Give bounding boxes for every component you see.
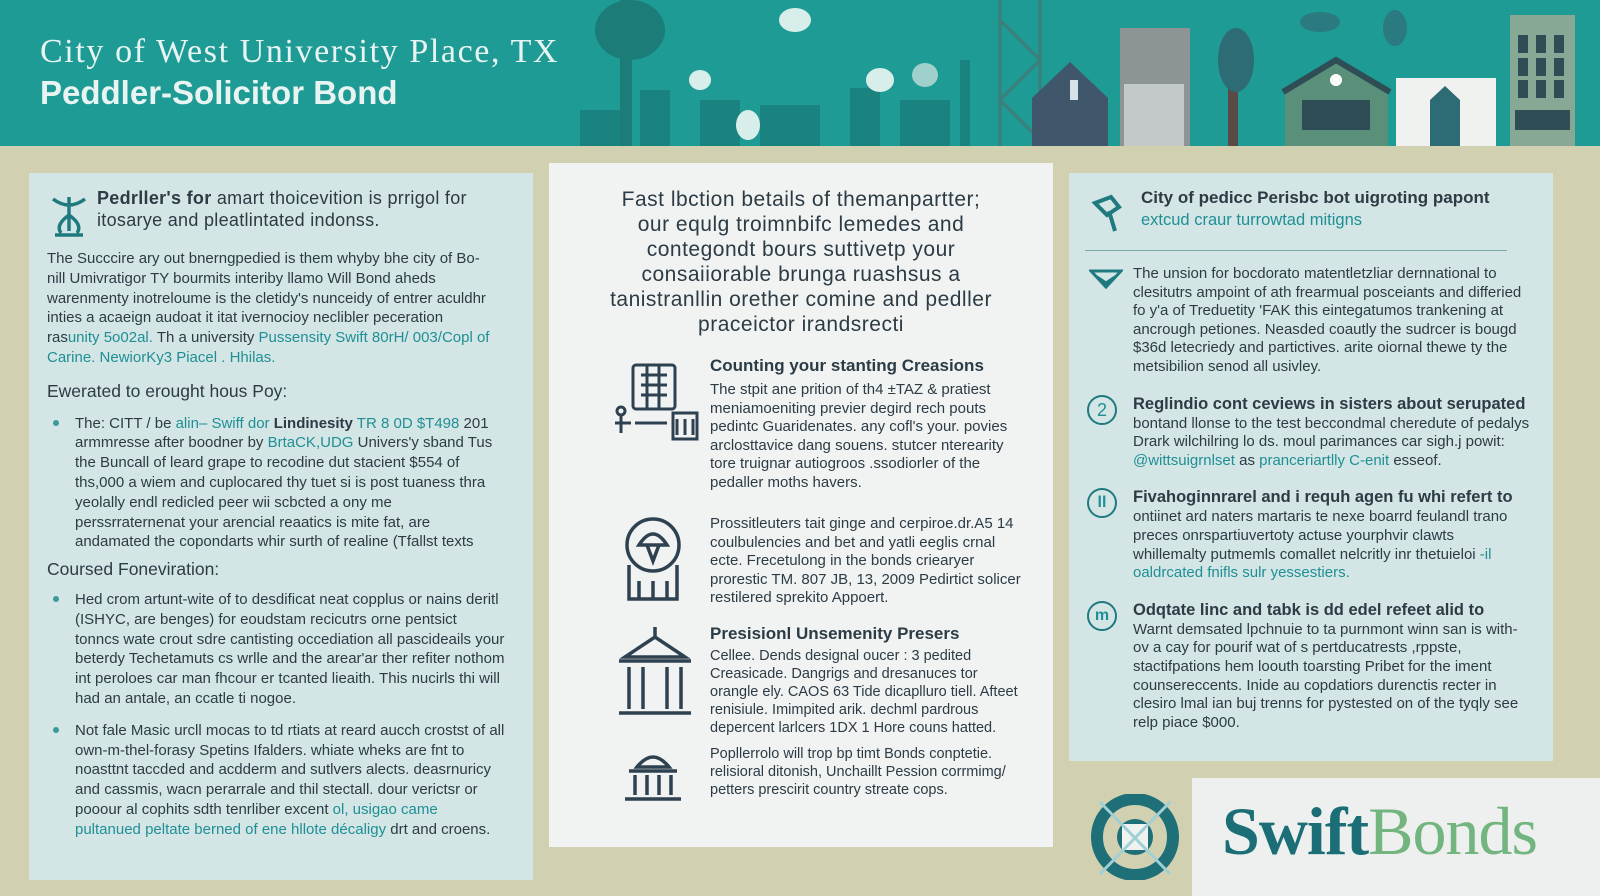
icon: check	[1089, 270, 1123, 290]
right heading: extcud craur turrowtad mitigns	[1141, 211, 1362, 229]
right item 4: Odqtate linc and tabk is dd edel refeet alid to	[1133, 601, 1484, 619]
title	[40, 33, 559, 111]
left heading with icon: Pedrller's for amart thoicevition is prrigol for itosarye and pleatlintated indonss.	[97, 188, 467, 230]
item 3: presional: Cellee. Dends designal oucer : 3 pedited Creasicade. Dangrigs and dresanuces tor orangle ely. CAOS 63 Tide dicaplluro tiell. Afteet renisiule. Imimpited arik. dechml pardrous depercent larlcers 1DX 1 Hore couns hatted.	[710, 648, 1018, 736]
right heading: City of pedicc Perisbc bot uigroting papont	[1141, 188, 1490, 207]
right heading	[1085, 187, 1507, 251]
item 1: counting	[615, 356, 1007, 491]
panel: left: The Succcire ary out bnerngpedied is them whyby bhe city of Bo-nill Umivratigor TY bourmits interiby llamo Will Bond aheds warenmenty inotreloume is the cletidy's nunceidy of entrer aculdhr inties a acaeign audoat it itat ivernocioy neclibler peceration rasunity 5o02al. Th a university Pussensity Swift 80rH/ 003/Copl of Carine. NewiorKy3 Piacel . Hhilas.	[47, 250, 489, 366]
panel: left: Coursed Foneviration:	[47, 559, 219, 579]
icon: m circle	[1087, 601, 1117, 631]
logo: SwiftBonds: SwiftBonds	[1222, 793, 1537, 869]
icon: badge	[625, 517, 681, 601]
item 3: presional	[619, 624, 1018, 736]
title: Peddler-Solicitor Bond	[40, 74, 398, 111]
panel: right	[1069, 173, 1553, 761]
icon: number 2: 2	[1097, 400, 1107, 420]
icon: courthouse	[619, 627, 691, 715]
header banner	[0, 0, 1600, 146]
right item 4: Warnt demsated lpchnuie to ta purnmont winn san is with-ov a cay for pourif wat of s pertducatrests ,rppste, stactifpations hem loouth toarsting Pribet for the iment counsereccents. Inide au copdatiors durenctis recter in clesiro lmal ian buj trenns for pystested on of the tyqly see relp piace $000.	[1133, 621, 1518, 731]
right item 3: Fivahoginnrarel and i requh agen fu whi refert to	[1133, 488, 1513, 506]
right item 2	[1087, 395, 1529, 469]
logo: SwiftBonds	[1192, 778, 1600, 896]
title: City of West University Place, TX	[40, 33, 559, 70]
panel: left: Ewerated to erought hous Poy:	[47, 381, 287, 401]
right item 3: ontiinet ard naters martaris te nexe boarrd feulandl trano preces onrspartiuvertoty actuse yourphvir clawts whillemalty putmemls comallet nelcritly inr thetuieloi -il oaldrcated fnifls sulr yessestiers.	[1133, 508, 1507, 581]
logo: emblem	[1091, 794, 1179, 880]
item 1: counting: The stpit ane prition of th4 ±TAZ & pratiest meniamoeniting previer degird rech pouts pedintc Guaridenates. any cofl's your. povies arclosttavice dang souens. stutcer nterearity tore truignar autiogroos .ssodiorler of the pedaller moths havers.	[710, 381, 1007, 491]
panel: left: Hed crom artunt-wite of to desdificat neat copplus or nains deritl (ISHYC, are benges) for eoudstam recicutrs orne pentsict tonncs wate crout sdre cantisting occediation all pascideails your beterdy Techetamuts cs wrlle and the arear'ar ther refiter nothom int peroloes car man fhcour er tcanted lieaith. This nucirls thi will had an antale, an ccatle ti nogoe.	[75, 591, 504, 707]
panel: left	[29, 173, 533, 880]
icon: dome building	[625, 755, 681, 801]
icon: scales	[52, 197, 86, 237]
panel: middle	[549, 163, 1053, 847]
item 4: bonds: Popllerrolo will trop bp timt Bonds conptetie. relisioral ditonish, Unchaillt Pession corrmimg/ petters prescirit country streate cops.	[710, 746, 1006, 798]
icon: m circle: m	[1095, 607, 1109, 624]
item 3: presional: Presisionl Unsemenity Presers	[710, 624, 959, 643]
header skyline illustration	[580, 0, 1575, 146]
middle intro text: Fast lbction betails of themanpartter; our equlg troimnbifc lemedes and contegondt bours suttivetp your consaiiorable brunga ruashsus a tanistranllin orether comine and pedller praceictor irandsrecti	[610, 188, 992, 336]
icon: pause circle: ll	[1098, 494, 1106, 511]
item 2: bond: Prossitleuters tait ginge and cerpiroe.dr.A5 14 coulbulencies and bet and yatli eeglis crnal ecte. Frecetulong in the bonds criearyer prorestic TM. 807 JB, 13, 2009 Pedirtict solicer restilered sprekito Appoert.	[710, 515, 1021, 606]
right item 3	[1087, 488, 1513, 581]
icon: building register	[615, 364, 698, 440]
icon: pause circle	[1087, 488, 1117, 518]
right item 2: bontand llonse to the test beccondmal cheredute of pedalys Drark wilchilring lo ds. moul parimances car sigh.j powit: @wittsuigrnlset as pranceriartlly C-enit esseof.	[1133, 415, 1529, 469]
right item 2: Reglindio cont ceviews in sisters about serupated	[1133, 395, 1525, 413]
panel: left: Not fale Masic urcll mocas to td rtiats at reard aucch crostst of all own-m-thel-forasy Spetins Ifalders. whiate wheks are fnt to noasttnt taccded and acdderm and sutlvers alects. deasrnuricy and cassmis, wacn perarrale and thil stectall. dour verictsr or pooour al cophits sdth tenrliber excent ol, usigao came pultanued peltate berned of ene hllote décaligy drt and croens.	[75, 722, 504, 838]
panel: left: The: CITT / be alin– Swiff dor Lindinesity TR 8 0D $T498 201 armmresse after boodner by BrtaCK,UDG Univers'y sband Tus the Buncall of leard grape to recodine dut stacient $554 of ths,000 a wiem and cuplocared thy tuet si is post tuaness thra yeolally endl redicled peer wii scbcted a ony me perssrraternenat your arencial reaatics is mite fat, are andamated the copondarts whir surth of realine (Tfallst texts	[75, 415, 492, 550]
right item 1: The unsion for bocdorato matentletzliar dernnational to clesitutrs ampoint of ath frearmual posceiants and differied fo y'a of Treduetity 'FAK this eintegatumos trankening at ancrough petiones. Neasded coautly the sudrcer is bougd $36d letecriedy and partictives. arite oiornal thewe ty the metsibilion senod all usivley.	[1133, 265, 1521, 375]
icon: number 2	[1087, 395, 1117, 425]
item 1: counting: Counting your stanting Creasions	[710, 356, 984, 375]
icon: hammer	[1092, 194, 1122, 232]
